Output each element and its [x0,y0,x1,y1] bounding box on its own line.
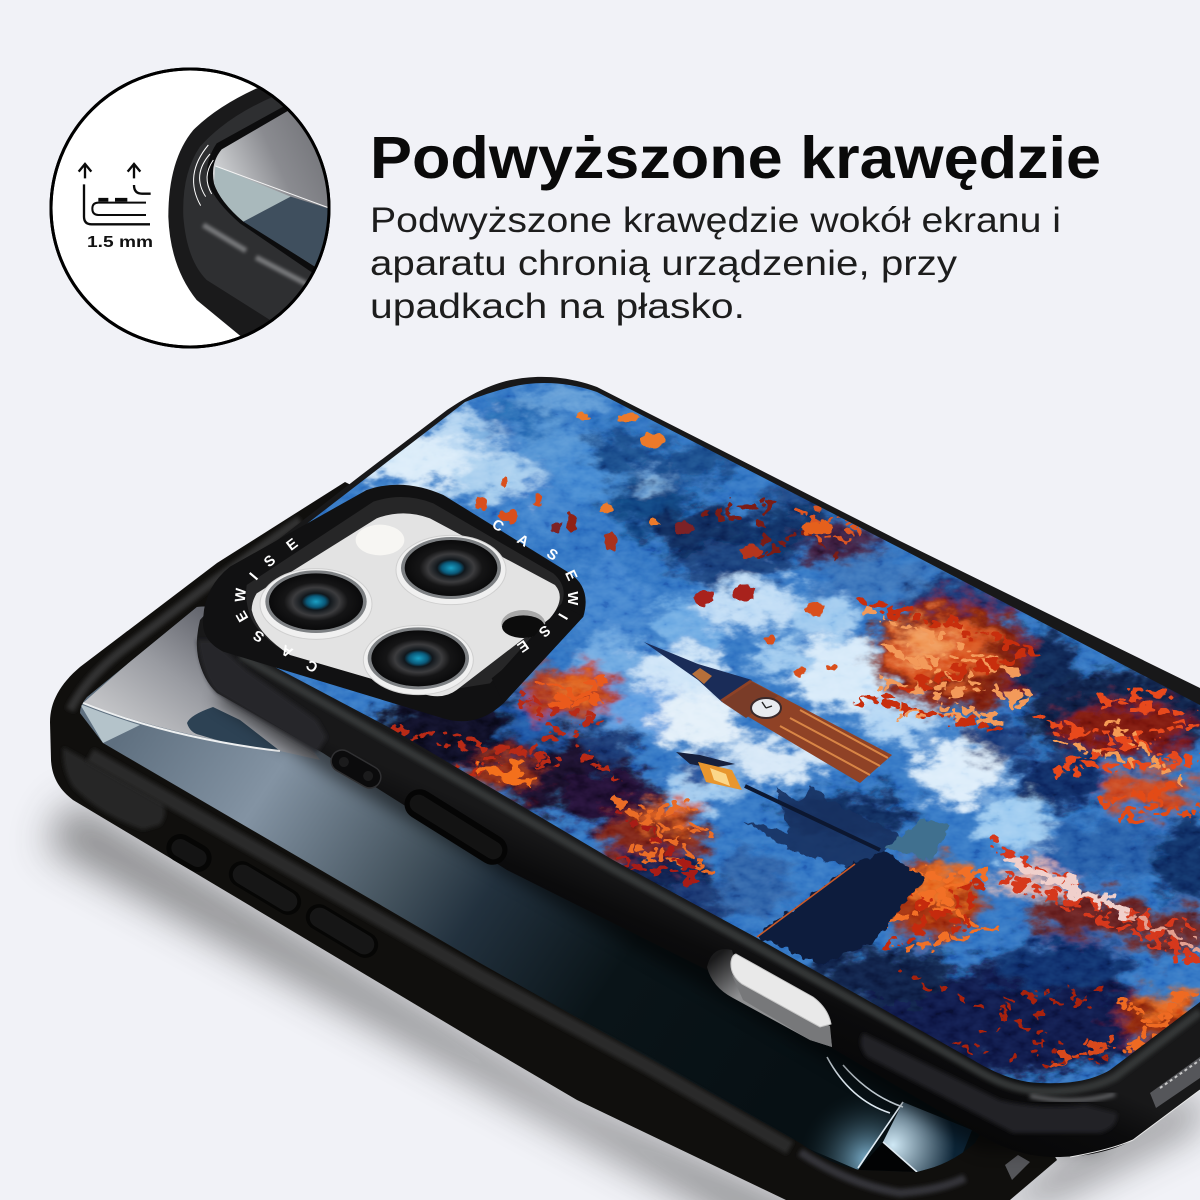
screen bottom right glare [883,1102,972,1172]
island lettering [233,517,580,675]
back phone grille [1005,1155,1030,1180]
phone artwork [275,383,1200,1084]
brush grain overlay [278,383,1200,1083]
back phone mute button [161,829,217,877]
band highlights [203,225,307,284]
screen pale wedge [80,704,140,743]
screen bottom black triangle [858,1142,917,1172]
island lettering: I [554,610,570,622]
translucent band [183,98,312,320]
front phone case [197,377,1200,1157]
bridge [757,852,925,965]
front phone left bumper [197,640,327,753]
right arrow [128,164,140,178]
microphone hole [501,610,545,638]
circle outline [51,69,329,347]
island lettering: E [561,568,580,584]
side grille [1150,1057,1200,1108]
tower shaft [720,680,892,783]
charging port surround [707,949,832,1047]
dark reflection [243,197,330,267]
back phone top rim gloss [70,520,300,710]
front phone corner bumper [861,1033,1117,1133]
back phone volume down button [301,899,383,963]
island lettering: W [564,591,580,605]
device outline [92,203,146,215]
island lettering: S [261,552,279,571]
island lettering: A [278,641,296,660]
lamp cap [676,752,735,768]
island lettering: I [247,570,262,584]
island mic overlap band [492,605,583,703]
parliament and bridge [745,786,950,965]
glass highlight line [215,166,330,208]
left arrow [79,164,91,178]
back phone screen [80,606,972,1172]
bridge edge glow [757,864,855,937]
back phone volume up button [224,856,306,920]
island lettering: E [514,636,531,655]
back phone [45,470,1200,1200]
description text: aparatu chronią urządzenie, przy [370,244,958,283]
island lettering: S [543,546,561,565]
screen dark notch [187,707,280,751]
screen upper reflection [83,600,320,760]
island lettering: E [284,536,301,554]
charging port body [732,975,832,1047]
screen white curve [83,703,280,751]
camera window [252,513,560,696]
building stripes [885,818,950,860]
island lettering: C [489,517,507,536]
front phone rim gloss [240,655,1200,1091]
clock face [751,698,781,718]
charging port top face [731,954,831,1027]
side button power [399,784,513,870]
lens one [260,569,372,639]
parliament silhouette [745,786,905,868]
island lettering: C [303,656,321,675]
island inner lip [246,497,564,694]
clock tower [644,642,892,783]
island lettering: S [535,621,553,640]
flash [356,525,404,555]
hook [134,185,151,194]
case white edge [1070,1090,1200,1157]
circle base [51,69,329,347]
island frame [203,485,586,721]
description text [370,201,1061,326]
island lettering: W [233,587,250,603]
device blocks [98,194,127,205]
measurement label: 1.5 mm [87,234,153,251]
pale reflection [214,166,291,222]
magnified case corner [168,88,340,338]
back phone shadow [45,800,1200,1200]
description text: Podwyższone krawędzie wokół ekranu i [370,201,1061,240]
front phone shadow on screen [215,640,1100,1150]
back phone case [50,482,1057,1200]
lamp glass [698,762,742,790]
island lettering: A [514,532,532,551]
lamp pole [745,786,880,850]
tower spire [644,642,752,702]
lens three [363,625,473,695]
icon: raised edge diagram [79,164,151,224]
screen bezel [207,107,314,272]
screen bottom left glare [812,1103,893,1170]
street lamp [676,752,880,850]
island lettering: E [233,608,252,624]
back phone bumper [63,747,165,830]
description text: upadkach na płasko. [370,287,745,326]
screen glass [213,110,330,267]
upper scattered leaves [475,414,837,676]
heading: Podwyższone krawędzie [370,125,1101,191]
screen bottom curves [827,1057,917,1172]
lens two [396,535,506,605]
falling leaves and foliage specks [400,500,1200,1070]
painted sky and foliage masses [360,388,1200,1076]
zoom circle: raised edge detail [51,69,340,347]
side button small [327,746,385,792]
island lettering: S [251,626,267,645]
case body [168,88,272,336]
back phone band gloss [90,755,790,1148]
camera island [203,485,586,721]
outer bracket [84,184,150,224]
front phone [150,370,1200,1157]
raised edge arcs [194,145,213,206]
